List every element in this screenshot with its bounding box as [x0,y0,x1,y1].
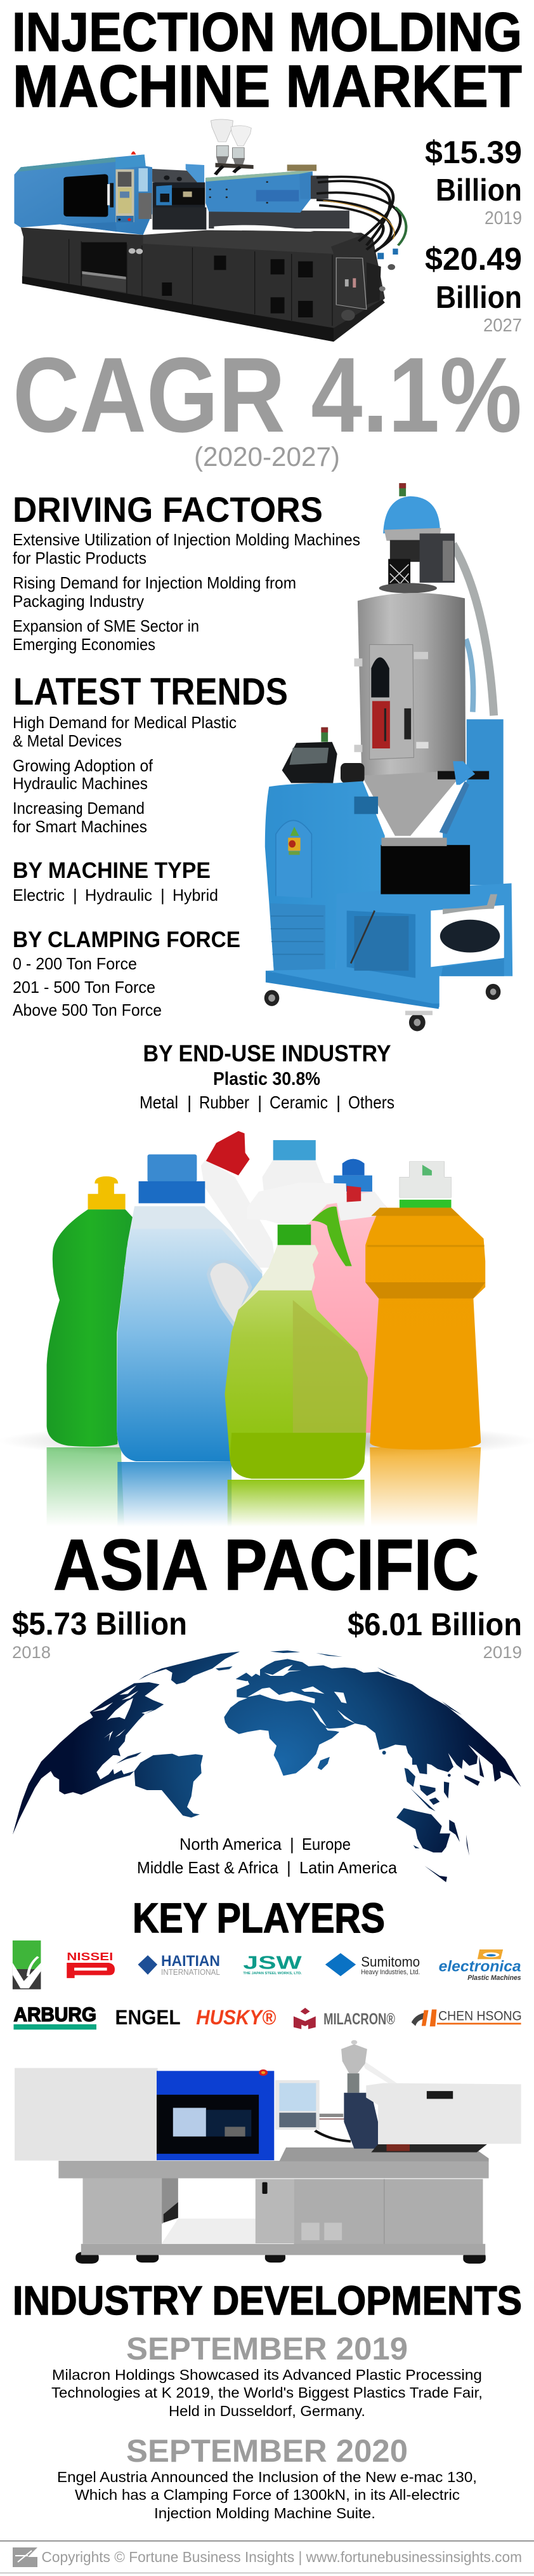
panel: driving factors: Packaging Industry [13,592,144,611]
development: September 2019: Milacron Holdings Showcased its Advanced Plastic Processing [52,2367,482,2383]
panel: driving factors: DRIVING FACTORS [13,489,323,529]
panel: latest trends: LATEST TRENDS [13,670,288,713]
logo: Milacron: MILACRON® [323,2010,395,2028]
logo: Haitian: HAITIAN [161,1953,220,1970]
market value 2027: 2027 [483,315,522,336]
logo: green e [13,1941,41,1989]
regional list: Europe [302,1835,351,1854]
illustration: white and blue injection molding machine [15,2040,521,2264]
regional list: North America [179,1835,282,1854]
panel: latest trends: Growing Adoption of [13,756,153,775]
development: September 2020: Engel Austria Announced the Inclusion of the New e-mac 130, [57,2469,477,2485]
panel: by machine type: Hybrid [173,886,218,905]
panel: latest trends: High Demand for Medical Plastic [13,713,237,732]
logo: Arburg [13,2003,96,2029]
logo: Milacron [294,2008,395,2029]
market value 2019: Billion [436,173,522,208]
panel: by clamping force: 0 - 200 Ton Force [13,954,137,973]
logo: Arburg: ARBURG [13,2003,96,2026]
regional list: Middle East & Africa [137,1858,279,1877]
panel: by machine type: BY MACHINE TYPE [13,858,211,883]
panel: by clamping force: Above 500 Ton Force [13,1000,162,1019]
panel: driving factors [13,489,360,654]
title [12,2,522,119]
panel: latest trends: Increasing Demand [13,799,145,818]
footer copyright: Copyrights © Fortune Business Insights | www.fortunebusinessinsights.com [42,2549,522,2565]
panel: by machine type [13,858,218,905]
heading: key players: KEY PLAYERS [133,1894,385,1941]
panel: by machine type: Electric [13,886,65,905]
development: September 2019 [51,2331,483,2419]
illustration: blue hopper dryer [264,483,512,1031]
development: September 2020: Which has a Clamping Force of 1300kN, in its All-electric [75,2486,460,2503]
logo: JSW: JSW [243,1952,302,1973]
logo: Haitian [138,1953,220,1977]
panel: by machine type: Hydraulic [85,886,152,905]
regional list [137,1835,398,1877]
logo: Sumitomo [325,1953,420,1976]
market value 2019: $15.39 [425,135,522,170]
regional list: | [287,1858,291,1877]
market value 2019: 2019 [485,208,522,229]
market value 2027 [425,241,522,336]
panel: latest trends: Hydraulic Machines [13,774,148,793]
panel: by end-use industry [140,1040,394,1112]
panel: driving factors: Expansion of SME Sector in [13,616,199,635]
regional list: | [290,1835,294,1854]
regional value 2019: 2019 [483,1643,522,1662]
panel: by end-use industry: Others [348,1092,394,1112]
development: September 2020 [57,2433,477,2521]
panel: latest trends: & Metal Devices [13,731,122,750]
illustration: world map globe [13,1650,521,1882]
panel: driving factors: for Plastic Products [13,548,147,568]
regional value 2019: $6.01 Billion [348,1607,522,1642]
development: September 2020: SEPTEMBER 2020 [126,2433,408,2469]
regional value 2018: 2018 [12,1643,51,1662]
panel: driving factors: Rising Demand for Injection Molding from [13,573,296,592]
footer logo [13,2547,37,2567]
regional value 2018: $5.73 Billion [12,1606,187,1642]
heading: Asia Pacific: ASIA PACIFIC [53,1525,479,1605]
panel: by end-use industry: | [336,1092,341,1112]
panel: by end-use industry: Rubber [199,1092,249,1112]
panel: driving factors: Extensive Utilization of Injection Molding Machines [13,530,360,549]
logo: electronica [439,1949,521,1982]
illustration: blue injection molding machine [14,119,406,342]
illustration: plastic bottles [0,1131,534,1527]
panel: by machine type: | [73,886,77,905]
panel: by end-use industry: | [187,1092,192,1112]
regional list: Latin America [299,1858,398,1877]
logo: Nissei: NISSEI [67,1951,113,1963]
logo row: key players [13,1941,522,2029]
regional value 2018 [12,1606,187,1662]
development: September 2020: Injection Molding Machine Suite. [154,2505,375,2521]
panel: by end-use industry: | [257,1092,262,1112]
development: September 2019: Held in Dusseldorf, Germany. [169,2403,365,2419]
panel: latest trends: for Smart Machines [13,817,147,836]
CAGR figure: (2020-2027) [194,442,340,472]
market value 2027: $20.49 [425,241,522,277]
panel: by clamping force [13,927,240,1019]
logo: Husky: HUSKY® [196,2007,276,2029]
logo: Nissei [67,1951,115,1978]
logo: Sumitomo: Heavy Industries, Ltd. [361,1967,420,1975]
market value 2027: Billion [436,281,522,315]
panel: latest trends [13,670,288,836]
panel: by clamping force: 201 - 500 Ton Force [13,978,155,997]
logo: Haitian: INTERNATIONAL [161,1968,220,1977]
logo: Engel: ENGEL [115,2007,181,2029]
logo: JSW: THE JAPAN STEEL WORKS, LTD. [243,1972,302,1975]
panel: driving factors: Emerging Economies [13,635,155,654]
market value 2019 [425,135,522,229]
panel: by machine type: | [160,886,165,905]
logo: Sumitomo: Sumitomo [361,1954,420,1970]
panel: by end-use industry: BY END-USE INDUSTRY [143,1040,391,1066]
development: September 2019: SEPTEMBER 2019 [126,2331,408,2367]
regional value 2019 [348,1607,522,1662]
panel: by end-use industry: Ceramic [270,1092,328,1112]
panel: by end-use industry: Metal [140,1092,178,1112]
panel: by clamping force: BY CLAMPING FORCE [13,927,240,952]
panel: by end-use industry: Plastic 30.8% [213,1069,320,1089]
logo: Chen Hsong [412,2008,522,2026]
development: September 2019: Technologies at K 2019, the World's Biggest Plastics Trade Fair, [51,2384,483,2401]
